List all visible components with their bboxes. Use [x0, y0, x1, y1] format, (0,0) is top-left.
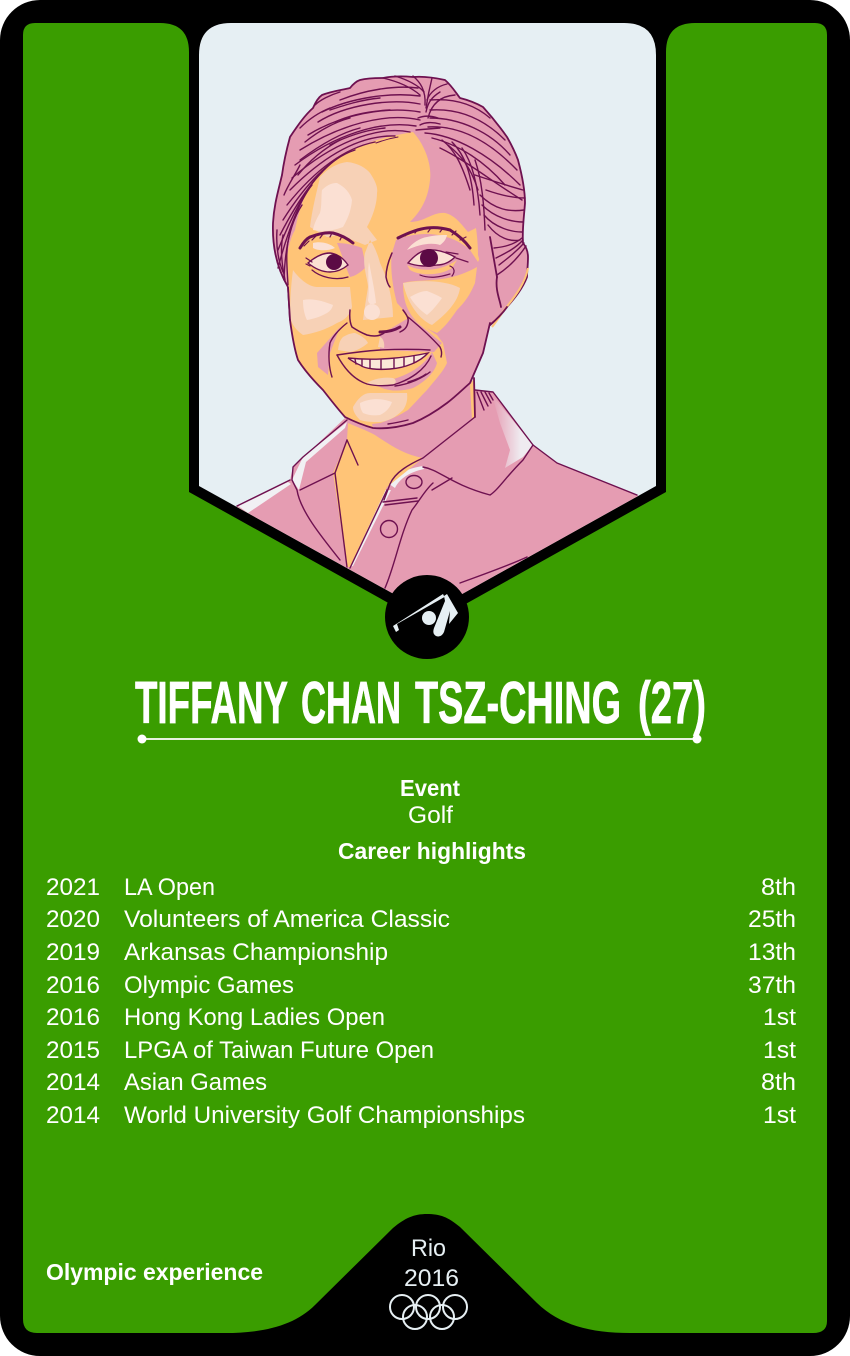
title: CHAN	[301, 670, 401, 736]
icon: golf	[393, 594, 458, 636]
career highlights table: World University Golf Championships	[124, 1102, 525, 1129]
sport badge	[385, 575, 469, 659]
career highlights table: Volunteers of America Classic	[124, 906, 450, 933]
eyebrows	[300, 228, 470, 248]
title: (27)	[638, 670, 706, 736]
career highlights table: 37th	[748, 972, 796, 999]
hair	[273, 76, 528, 330]
right under-eye	[407, 260, 457, 274]
career highlights table: 2019	[46, 939, 100, 966]
shirt edge highlights	[238, 422, 424, 567]
career highlights table: 2015	[46, 1037, 100, 1064]
event	[400, 775, 460, 829]
eyes	[306, 249, 468, 279]
title: TIFFANY	[135, 670, 288, 736]
career highlights table: 1st	[763, 1102, 796, 1129]
olympic games badge: Rio	[411, 1235, 446, 1262]
career highlights table: 2016	[46, 1004, 100, 1031]
skin highlights	[303, 183, 447, 415]
career highlights table: 2014	[46, 1069, 100, 1096]
event: Golf	[408, 802, 453, 829]
career highlights table: 2021	[46, 874, 100, 901]
career highlights table: 2020	[46, 906, 100, 933]
career highlights table: 25th	[748, 906, 796, 933]
career highlights table: LA Open	[124, 874, 215, 901]
shirt highlights	[495, 400, 532, 468]
career highlights heading: Career highlights	[338, 838, 526, 864]
olympic experience label: Olympic experience	[46, 1259, 263, 1285]
career highlights table: Arkansas Championship	[124, 939, 388, 966]
icon: olympic rings	[390, 1295, 467, 1329]
career highlights table: 2016	[46, 972, 100, 999]
olympic games badge	[390, 1235, 467, 1329]
shirt	[237, 380, 638, 594]
ear edge	[492, 268, 528, 327]
career highlights table: 8th	[761, 874, 796, 901]
career highlights table: Olympic Games	[124, 972, 294, 999]
mouth shadow	[317, 243, 442, 391]
career highlights table: 13th	[748, 939, 796, 966]
career highlights table: Asian Games	[124, 1069, 267, 1096]
career highlights table: 1st	[763, 1037, 796, 1064]
forehead shadow	[410, 132, 490, 262]
face outline	[288, 237, 507, 428]
career highlights table	[46, 874, 796, 1129]
olympic games badge: 2016	[404, 1265, 459, 1292]
title: TSZ-CHING	[415, 670, 621, 736]
career highlights table: LPGA of Taiwan Future Open	[124, 1037, 434, 1064]
mouth lines	[329, 317, 442, 424]
career highlights table: Hong Kong Ladies Open	[124, 1004, 385, 1031]
title	[135, 670, 706, 744]
hair strands	[277, 76, 526, 285]
neck	[333, 378, 476, 567]
mouth	[348, 353, 428, 369]
career highlights table: 1st	[763, 1004, 796, 1031]
skin glow	[290, 162, 460, 422]
career highlights table: 2014	[46, 1102, 100, 1129]
portrait illustration	[199, 23, 656, 594]
collar and placket lines	[237, 390, 637, 588]
right cheek	[403, 267, 477, 333]
event: Event	[400, 775, 460, 801]
career highlights table: 8th	[761, 1069, 796, 1096]
nose	[350, 253, 408, 336]
face shadow	[372, 234, 500, 428]
face	[287, 132, 500, 428]
